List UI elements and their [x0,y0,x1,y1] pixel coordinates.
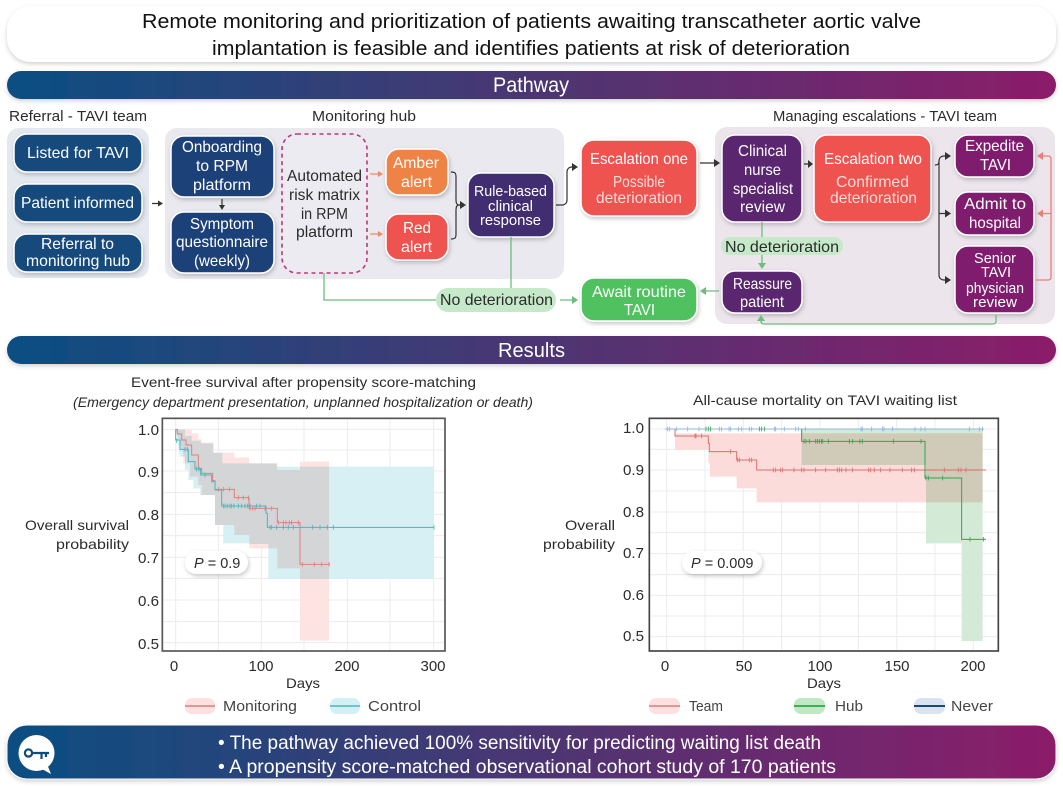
x-axis tick labels: 150 [884,658,910,675]
box: clinical nurse specialist review: Clinical [738,143,787,160]
box: amber alert [386,149,448,195]
axis title: overall survival probability: Overall survival [25,517,129,533]
key message banner [7,725,1056,779]
box: onboarding: Onboarding [182,139,262,156]
pill: no deterioration (team): No deterioration [725,239,839,256]
y-axis tick labels: 0.9 [623,462,644,479]
box: onboarding: platform [193,177,251,194]
pill: no deterioration (hub) [436,288,556,312]
box: red alert [386,214,448,260]
box: automated risk matrix: risk matrix [289,187,360,204]
chart title: event-free survival: (Emergency department presentation, unplanned hospitalization or death) [73,394,533,410]
key message text: • The pathway achieved 100% sensitivity for predicting waiting list death [218,733,821,754]
x-axis title: Days [286,675,320,691]
y-axis tick labels: 0.6 [138,593,159,610]
x-axis tick labels: 0 [170,658,178,675]
x-axis tick labels: 300 [420,658,446,675]
box: clinical nurse specialist review: specialist [733,181,793,198]
box: patient informed: Patient informed [21,195,134,212]
box: escalation two: Escalation two [824,151,922,168]
box: admit to hospital [955,192,1034,235]
legend item: team [649,698,723,715]
legend item: hub [794,698,863,715]
callout: P value [185,551,248,574]
box: onboarding [171,136,274,197]
x-axis tick labels [661,658,986,675]
box: amber alert: Amber [393,155,440,172]
legend item: never: Never [951,698,993,715]
box: escalation two: deterioration [830,190,917,207]
chart: event-free survival Kaplan-Meier [138,418,446,691]
box: senior TAVI physician review: review [973,294,1017,311]
legend item: monitoring: Monitoring [223,698,297,715]
arrows: pathway flow black [152,152,951,284]
box: symptom questionnaire: questionnaire [176,234,268,251]
box: admit to hospital: hospital [969,215,1021,232]
chart: all-cause mortality Kaplan-Meier [623,418,998,691]
legend item: never [914,698,993,715]
legend item: team: Team [689,698,723,715]
box: referral to monitoring hub: monitoring hub [26,253,130,270]
box: escalation one [581,140,697,216]
box: rule-based clinical response: Rule-based [474,183,547,200]
axis title: overall survival probability: probability [56,536,129,552]
box: onboarding: to RPM [196,158,248,175]
chart title: event-free survival [73,374,533,410]
x-axis title: Days [807,675,841,691]
y-axis tick labels: 1.0 [623,420,644,437]
heading: monitoring hub: Monitoring hub [312,108,416,125]
box: await routine TAVI: Await routine [592,284,686,301]
box: senior TAVI physician review [955,246,1034,313]
callout: P value [682,551,762,574]
box: listed for TAVI [14,134,142,172]
key message text: • A propensity score-matched observational cohort study of 170 patients [218,757,836,778]
title [7,6,1056,62]
y-axis tick labels: 0.8 [623,504,644,521]
box: clinical nurse specialist review: nurse [744,162,781,179]
box: automated risk matrix: platform [296,224,353,241]
legend item: monitoring [185,698,297,715]
y-axis tick labels [138,422,159,653]
box: expedite TAVI [955,135,1034,177]
box: referral to monitoring hub: Referral to [41,236,114,253]
box: escalation one: Escalation one [590,151,688,168]
callout: P value: P = 0.009 [691,556,753,572]
heading: pathway [7,71,1056,99]
title: implantation is feasible and identifies patients at risk of deterioration [212,38,850,60]
legend: mortality chart [649,698,993,715]
heading: results [7,336,1056,364]
heading: managing escalations: Managing escalations - TAVI team [773,108,997,125]
panel: managing escalations [715,127,1055,324]
x-axis tick labels: 100 [248,658,274,675]
box: senior TAVI physician review: TAVI [981,264,1011,281]
box: listed for TAVI: Listed for TAVI [27,145,129,162]
x-axis tick labels: 50 [736,658,752,675]
box: escalation one: Possible [613,174,665,191]
x-axis tick labels [170,658,446,675]
box: symptom questionnaire: Symptom [190,216,254,233]
box: symptom questionnaire [171,212,274,273]
box: admit to hospital: Admit to [964,196,1026,213]
panel: monitoring hub [165,128,564,279]
y-axis tick labels: 0.5 [623,628,644,645]
heading: results: Results [498,340,565,362]
box: reassure patient [722,271,802,313]
heading: pathway: Pathway [493,74,569,97]
panel: referral [7,128,149,278]
y-axis tick labels: 1.0 [138,422,159,439]
pill: no deterioration (hub): No deterioration [440,292,553,309]
box: rule-based clinical response [468,173,554,237]
x-axis tick labels: 0 [661,658,669,675]
box: amber alert: alert [401,174,433,191]
chart title: event-free survival: Event-free survival after propensity score-matching [131,374,476,390]
box: automated risk matrix: in RPM [301,206,348,223]
y-axis tick labels: 0.9 [138,464,159,481]
box: senior TAVI physician review: Senior [974,250,1016,267]
box: red alert: alert [401,239,433,256]
y-axis tick labels: 0.8 [138,507,159,524]
box: await routine TAVI: TAVI [624,302,655,319]
axis title: overall probability [543,517,615,552]
title: Remote monitoring and prioritization of patients awaiting transcatheter aortic valve [142,11,921,33]
legend item: control [330,698,421,715]
axis title: overall probability: probability [543,536,615,552]
box: expedite TAVI: Expedite [965,138,1024,155]
icon: key in speech bubble [18,735,54,774]
x-axis tick labels: 200 [960,658,986,675]
box: rule-based clinical response: response [480,212,541,229]
box: senior TAVI physician review: physician [966,280,1024,297]
callout: P value: P = 0.9 [194,556,240,572]
box: escalation two [814,135,931,222]
box: clinical nurse specialist review [722,135,802,222]
box: expedite TAVI: TAVI [980,157,1011,174]
box: escalation one: deterioration [596,190,682,207]
arrows: no deterioration green [324,222,996,324]
box: symptom questionnaire: (weekly) [194,253,250,270]
box: automated risk matrix: Automated [287,168,362,185]
y-axis tick labels: 0.7 [138,550,159,567]
box: referral to monitoring hub [14,234,142,272]
arrows: alert orange and red [370,152,1051,280]
box: rule-based clinical response: clinical [488,198,533,215]
box: clinical nurse specialist review: review [740,199,785,216]
axis title: overall survival probability [25,517,129,552]
axis title: overall probability: Overall [565,517,615,533]
box: reassure patient: Reassure [733,276,792,293]
y-axis tick labels [623,420,644,645]
y-axis tick labels: 0.7 [623,545,644,562]
x-axis tick labels: 100 [807,658,833,675]
x-axis tick labels: 200 [334,658,360,675]
heading: referral: Referral - TAVI team [9,108,147,125]
legend item: hub: Hub [835,698,863,715]
box: escalation two: Confirmed [836,174,909,191]
box: await routine TAVI [581,278,697,321]
y-axis tick labels: 0.6 [623,587,644,604]
legend: survival chart [185,698,421,715]
chart title: all-cause mortality: All-cause mortality on TAVI waiting list [693,392,957,408]
y-axis tick labels: 0.5 [138,636,159,653]
box: patient informed [14,184,142,222]
legend item: control: Control [368,698,421,715]
box: automated risk matrix [282,134,367,273]
box: reassure patient: patient [740,294,785,311]
box: red alert: Red [403,220,431,237]
key message text [218,733,836,778]
